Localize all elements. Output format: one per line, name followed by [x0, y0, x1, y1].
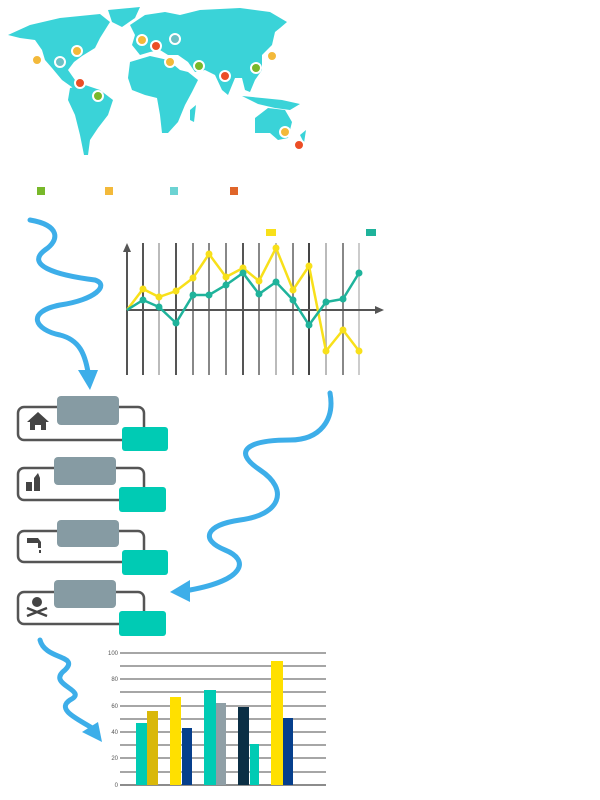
- arrow 1: [30, 220, 101, 390]
- step boxes: [18, 396, 168, 636]
- arrow 2: [170, 393, 331, 602]
- map markers: [32, 34, 304, 150]
- line chart: [123, 229, 384, 375]
- arrow 3: [40, 640, 102, 742]
- icons: [26, 412, 49, 616]
- bar chart: 40: [111, 730, 119, 736]
- map legend: [37, 187, 238, 195]
- bar chart: 0: [115, 783, 119, 789]
- world map: [8, 7, 306, 155]
- bar chart: 20: [111, 756, 119, 762]
- bar chart: 100: [108, 651, 119, 657]
- bar chart: [108, 651, 326, 789]
- bar chart: 80: [111, 677, 119, 683]
- bar chart: 60: [111, 704, 119, 710]
